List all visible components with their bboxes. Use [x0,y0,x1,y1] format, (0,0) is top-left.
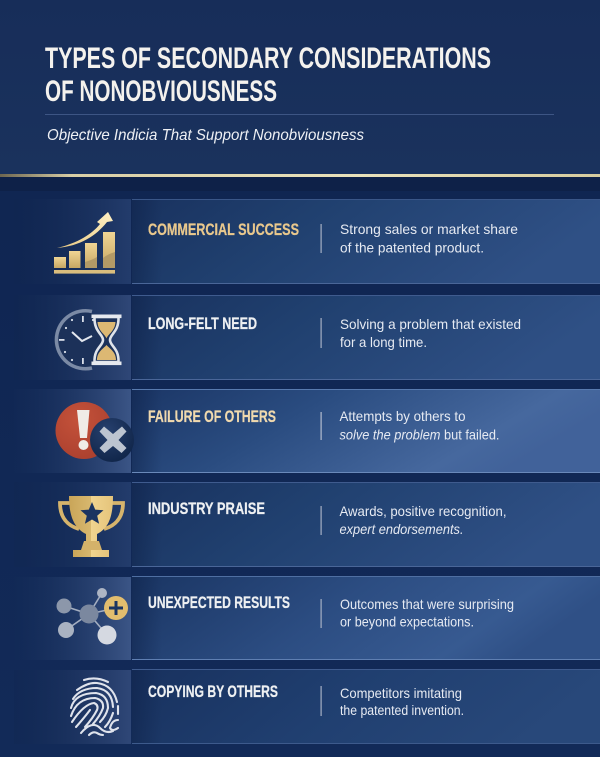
icon: warning and cross [56,402,134,462]
description: failure of others [340,408,500,442]
description: failure of others: Attempts by others to [340,408,466,424]
description: industry praise: expert endorsements. [340,521,464,537]
description: industry praise [340,503,506,537]
label: industry praise: INDUSTRY PRAISE [148,500,265,518]
description: unexpected results [340,596,514,630]
title [45,42,491,108]
description: commercial success: of the patented product. [340,240,484,256]
icon: fingerprint [71,678,118,735]
icon: network with plus [56,588,128,644]
row: industry praise [14,482,600,567]
icon: rising bar chart [54,212,115,274]
description: long-felt need: Solving a problem that existed [340,316,521,332]
description: long-felt need: for a long time. [340,334,427,350]
label: unexpected results: UNEXPECTED RESULTS [148,594,290,612]
description: long-felt need [340,316,521,350]
label: failure of others: FAILURE OF OTHERS [148,408,276,426]
description: commercial success [340,221,518,256]
gold divider [0,174,600,177]
icon: trophy [60,496,123,557]
description: industry praise: Awards, positive recognition, [340,503,506,519]
row: failure of others [14,389,600,473]
label: copying by others: COPYING BY OTHERS [148,683,278,701]
description: unexpected results: Outcomes that were surprising [340,596,514,612]
row: commercial success [14,199,600,284]
description: failure of others: solve the problem but failed. [340,426,500,442]
description: copying by others: the patented invention. [340,703,464,718]
header panel [0,0,600,174]
row: long-felt need [14,295,600,380]
label: commercial success: COMMERCIAL SUCCESS [148,221,299,239]
subtitle: Objective Indicia That Support Nonobviousness [47,127,364,144]
row: unexpected results [14,576,600,660]
description: commercial success: Strong sales or market share [340,221,518,237]
description: copying by others: Competitors imitating [340,685,462,701]
row: copying by others [14,669,600,744]
icon: clock and hourglass [54,311,122,369]
label: long-felt need: LONG-FELT NEED [148,315,257,333]
title: OF NONOBVIOUSNESS [45,75,277,108]
description: copying by others [340,685,464,718]
description: unexpected results: or beyond expectations. [340,614,474,630]
